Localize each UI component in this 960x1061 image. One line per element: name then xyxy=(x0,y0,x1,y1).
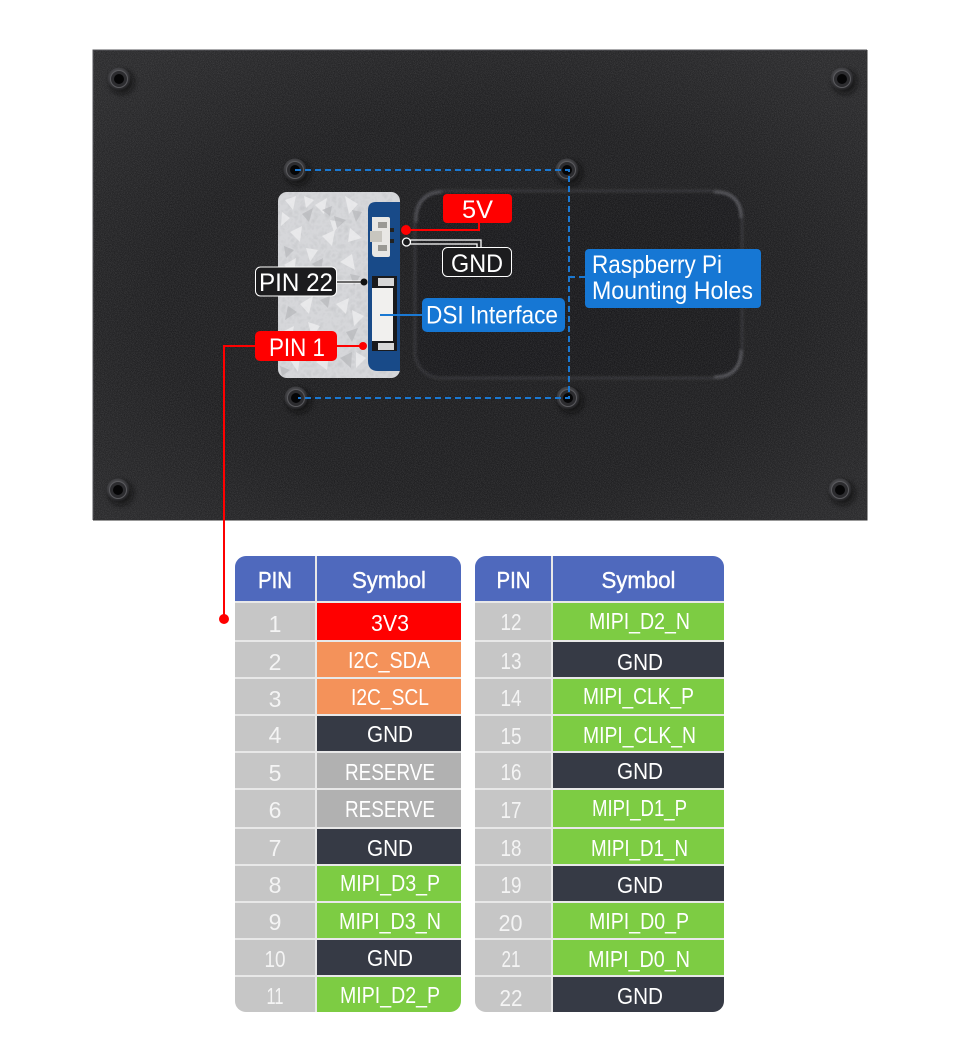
screw holes xyxy=(106,68,857,505)
callout: Raspberry Pi Mounting Holes xyxy=(585,249,761,308)
symbols right: MIPI_CLK_P xyxy=(583,683,694,709)
symbols right: MIPI_CLK_N xyxy=(583,722,696,748)
table header right xyxy=(475,556,724,601)
callout: Raspberry Pi Mounting Holes: Mounting Holes xyxy=(592,277,753,305)
callout: 5V: 5V xyxy=(462,196,493,224)
callout: PIN 22 xyxy=(256,267,368,297)
symbols left: GND xyxy=(367,721,413,747)
table header left xyxy=(235,556,461,601)
symbols right: MIPI_D1_P xyxy=(592,795,687,821)
panel cutout with crystal pattern xyxy=(278,192,400,378)
callout: Raspberry Pi Mounting Holes: Raspberry Pi xyxy=(592,251,722,279)
pin numbers right: 15 xyxy=(500,723,522,749)
pin numbers left: 10 xyxy=(264,946,286,972)
table header right: Symbol xyxy=(602,567,676,593)
symbols left: MIPI_D2_P xyxy=(340,982,440,1008)
callout: 5V xyxy=(401,194,512,235)
pin numbers right: 17 xyxy=(500,797,522,823)
symbols right xyxy=(553,603,724,1012)
symbols right: MIPI_D2_N xyxy=(589,608,690,634)
callout: PIN 1 with leader to table xyxy=(219,331,367,624)
callout: GND: GND xyxy=(451,250,503,278)
panel: display back plate xyxy=(93,50,867,520)
pin numbers right: 20 xyxy=(498,910,522,936)
table header left: Symbol xyxy=(352,567,426,593)
callout: GND xyxy=(402,238,512,278)
embossed recess xyxy=(415,191,742,378)
callout: PIN 22: PIN 22 xyxy=(259,269,333,297)
symbols right: MIPI_D1_N xyxy=(591,835,688,861)
pin numbers left: 3 xyxy=(269,686,281,712)
symbols right: MIPI_D0_P xyxy=(589,908,689,934)
symbols left: GND xyxy=(367,945,413,971)
symbols right: GND xyxy=(617,872,663,898)
pin numbers left: 2 xyxy=(269,649,281,675)
symbols left: MIPI_D3_N xyxy=(339,908,441,934)
pin numbers right: 21 xyxy=(502,946,520,972)
mounting holes dashed outline xyxy=(295,170,585,398)
pin numbers left xyxy=(235,603,315,1012)
pin numbers left: 6 xyxy=(269,797,281,823)
symbols left: RESERVE xyxy=(345,796,435,822)
pin numbers left: 8 xyxy=(269,872,281,898)
symbols left xyxy=(317,603,461,1012)
table header left: PIN xyxy=(258,567,292,593)
table header right: PIN xyxy=(496,567,530,593)
symbols left: MIPI_D3_P xyxy=(340,870,440,896)
circuit board xyxy=(368,202,400,371)
pin numbers left: 7 xyxy=(269,835,281,861)
symbols left: GND xyxy=(367,835,413,861)
pin numbers right: 12 xyxy=(500,609,522,635)
pin numbers right: 19 xyxy=(500,872,522,898)
symbols right: GND xyxy=(617,649,663,675)
symbols right: MIPI_D0_N xyxy=(588,946,690,972)
callout: DSI Interface xyxy=(380,298,565,332)
pin numbers right: 14 xyxy=(500,685,522,711)
pin numbers right xyxy=(475,603,551,1012)
pin numbers right: 18 xyxy=(500,835,522,861)
symbols right: GND xyxy=(617,983,663,1009)
symbols left: 3V3 xyxy=(371,610,409,636)
symbols left: I2C_SDA xyxy=(348,647,431,673)
callout: PIN 1 with leader to table: PIN 1 xyxy=(269,334,325,362)
symbols left: RESERVE xyxy=(345,759,435,785)
symbols right: GND xyxy=(617,758,663,784)
callout: DSI Interface: DSI Interface xyxy=(426,302,558,330)
pin numbers right: 13 xyxy=(500,648,522,674)
pin numbers left: 1 xyxy=(269,611,281,637)
pin numbers left: 4 xyxy=(269,722,282,748)
pin numbers right: 22 xyxy=(500,985,522,1011)
pin numbers left: 11 xyxy=(266,983,284,1009)
pin numbers left: 5 xyxy=(269,760,281,786)
pin numbers left: 9 xyxy=(269,909,281,935)
pin numbers right: 16 xyxy=(500,759,522,785)
symbols left: I2C_SCL xyxy=(351,684,429,710)
table: pins 12 to 22 xyxy=(475,556,724,1012)
table: pins 1 to 11 xyxy=(235,556,461,1012)
